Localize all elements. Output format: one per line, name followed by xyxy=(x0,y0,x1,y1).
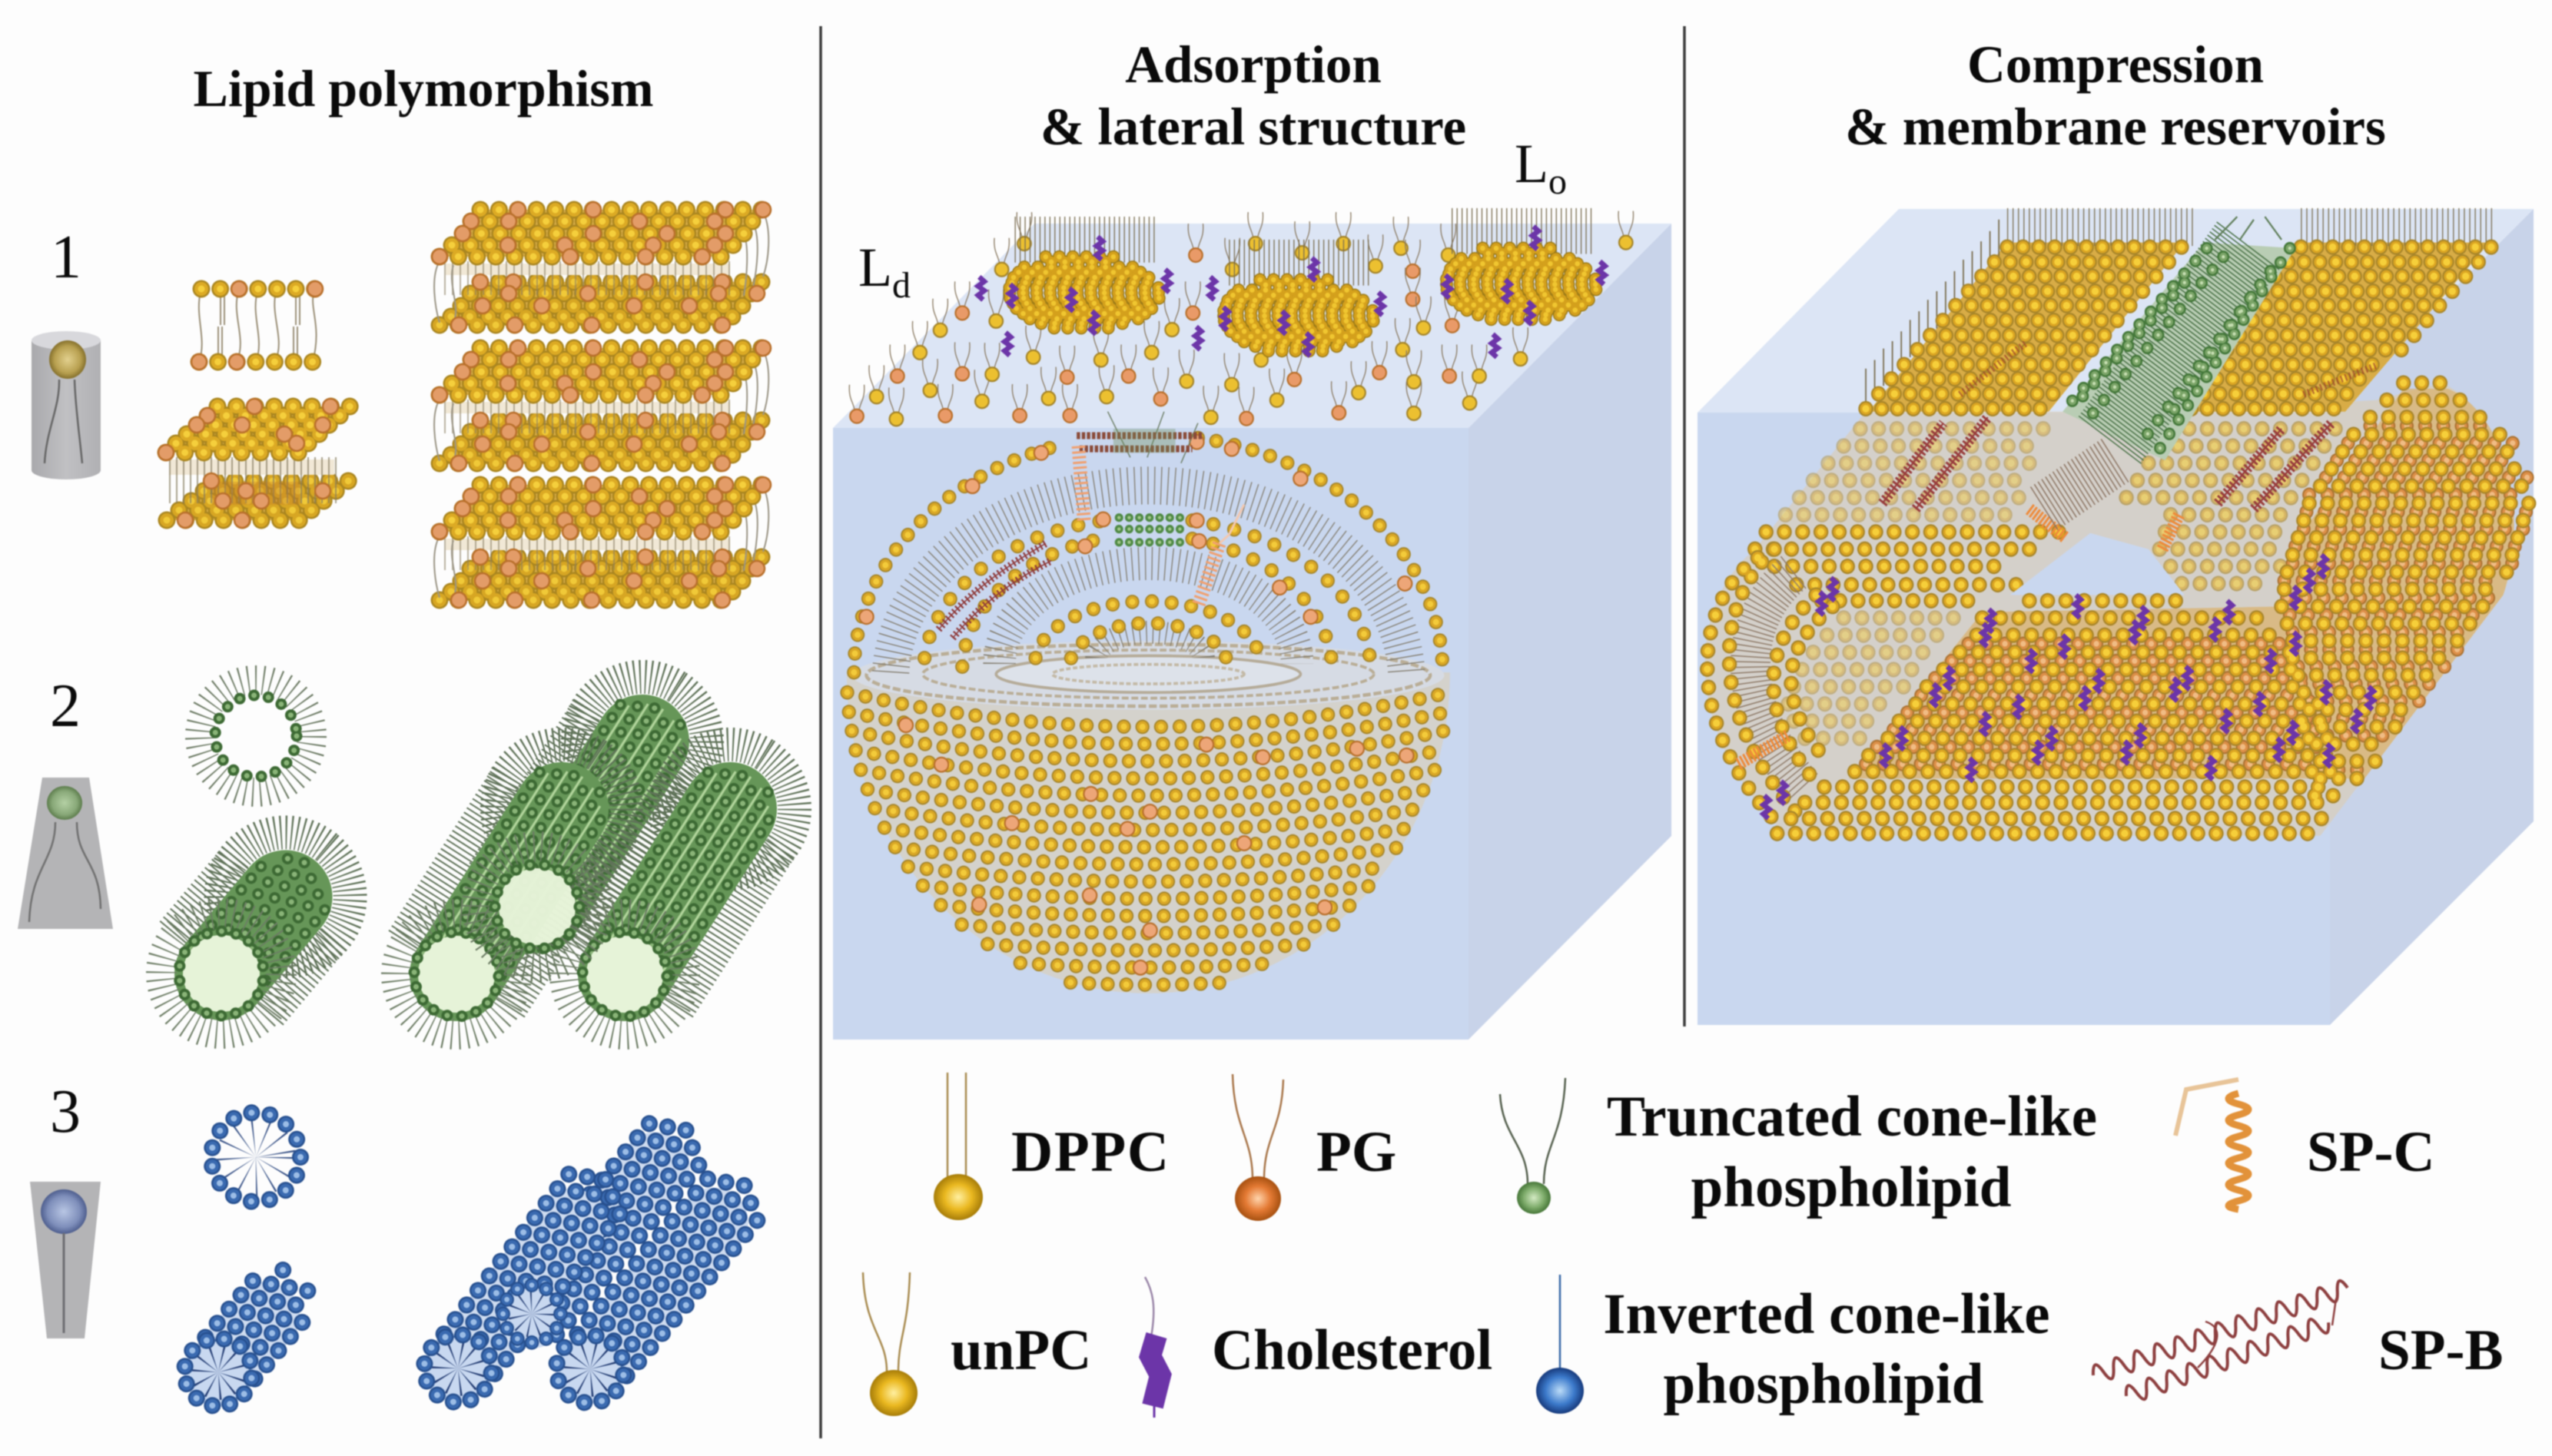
SP-B proteins under monolayer xyxy=(1960,343,2376,394)
collapsed film structure xyxy=(1705,217,2531,836)
liquid ordered raft 3 xyxy=(1446,231,1598,320)
hole between reservoir folds xyxy=(2010,533,2185,595)
heading: adsorption: & lateral structure xyxy=(1040,98,1466,156)
stacked lamellar bilayers: middle xyxy=(432,340,771,471)
lower sheet and right roll xyxy=(1777,383,2531,834)
SP-C helix left xyxy=(1078,446,1084,520)
icon: cylinder lipid shape xyxy=(32,331,101,479)
heading: adsorption: Adsorption xyxy=(1125,35,1382,94)
row 3: number: 3 xyxy=(50,1078,81,1146)
legend: unPC icon xyxy=(863,1272,918,1416)
green hexagonal tube cluster xyxy=(370,652,819,1060)
panel: lipid polymorphism xyxy=(18,59,819,1420)
left curl of the reservoir xyxy=(1707,549,1966,824)
SP-B proteins in folds xyxy=(1883,417,2331,509)
blue tube cluster xyxy=(410,1108,772,1417)
green reservoir band xyxy=(2043,217,2295,509)
SP-B dimer at top xyxy=(1077,412,1203,463)
legend: inverted cone lipid icon xyxy=(1536,1275,1584,1414)
vesicle xyxy=(847,412,1450,993)
water box xyxy=(1697,209,2534,1025)
legend: cholesterol label: Cholesterol xyxy=(1212,1318,1492,1382)
row 1: number: 1 xyxy=(51,224,81,291)
green lipid lattice xyxy=(1119,518,1184,542)
single bilayer sheet xyxy=(158,399,350,528)
blue single tube xyxy=(171,1253,326,1420)
small bilayer fragment xyxy=(191,281,323,370)
panel: adsorption and lateral structure xyxy=(833,35,1671,1040)
legend: inverted cone label: phospholipid xyxy=(1664,1352,1983,1416)
legend: truncated cone label: phospholipid xyxy=(1691,1156,2011,1219)
vesicle membrane arcs xyxy=(854,435,1442,672)
icon: inverted cone lipid shape xyxy=(30,1182,101,1338)
panel: compression and membrane reservoirs xyxy=(1697,35,2534,1025)
vesicle equator cross-section xyxy=(852,641,1445,710)
legend: truncated cone lipid icon xyxy=(1500,1078,1565,1214)
heading: compression: Compression xyxy=(1967,35,2264,94)
vesicle tails xyxy=(891,486,1406,672)
legend: PG label: PG xyxy=(1316,1120,1396,1184)
air-water interface monolayer xyxy=(847,211,1634,993)
cholesterol molecules at interface xyxy=(978,227,1605,357)
SP-B left xyxy=(938,543,1051,638)
legend: cholesterol icon xyxy=(1145,1277,1160,1418)
SP-C helix right xyxy=(1198,505,1244,606)
label Lo: o xyxy=(1548,161,1567,202)
legend: SP-B icon xyxy=(2090,1279,2351,1405)
heading: compression: & membrane reservoirs xyxy=(1845,98,2386,156)
vesicle lower hemisphere xyxy=(847,672,1450,993)
stacked lamellar bilayers: bottom xyxy=(432,477,771,608)
cholesterol in reservoir xyxy=(1764,555,2374,818)
liquid disordered lipids xyxy=(849,211,1634,426)
legend: SP-B label: SP-B xyxy=(2378,1318,2504,1382)
water box xyxy=(833,224,1671,1040)
legend: unPC label: unPC xyxy=(951,1318,1091,1382)
top monolayer with tails xyxy=(1866,220,2492,412)
legend: truncated cone label: Truncated cone-like xyxy=(1607,1085,2097,1149)
label Lo: L xyxy=(1515,133,1548,194)
icon: truncated cone lipid shape xyxy=(18,778,113,929)
blue micelle cross-section xyxy=(211,1113,300,1202)
SP-C proteins in folds xyxy=(1738,509,2179,764)
liquid ordered raft 2 xyxy=(1224,263,1375,351)
label Ld: d xyxy=(892,265,911,306)
faded reservoir beads, upper band xyxy=(1755,429,2354,601)
stacked lamellar bilayers: top xyxy=(432,202,771,333)
legend: PG icon xyxy=(1233,1074,1283,1221)
reservoir base tone xyxy=(1705,383,2514,836)
divider right xyxy=(1683,26,1686,1026)
heading: lipid polymorphism: Lipid polymorphism xyxy=(194,59,653,118)
legend: DPPC icon xyxy=(934,1073,983,1220)
legend xyxy=(863,1073,2504,1418)
green inverted micelle cross-section xyxy=(200,680,312,792)
label Ld: L xyxy=(858,237,892,298)
legend: SP-C label: SP-C xyxy=(2307,1120,2435,1184)
green single tube xyxy=(134,806,377,1061)
legend: inverted cone label: Inverted cone-like xyxy=(1603,1282,2050,1346)
liquid ordered raft 1 xyxy=(1010,240,1160,328)
divider left xyxy=(819,26,822,1438)
row 2: number: 2 xyxy=(50,672,81,740)
legend: SP-C icon xyxy=(2175,1080,2248,1209)
legend: DPPC label: DPPC xyxy=(1011,1120,1169,1184)
